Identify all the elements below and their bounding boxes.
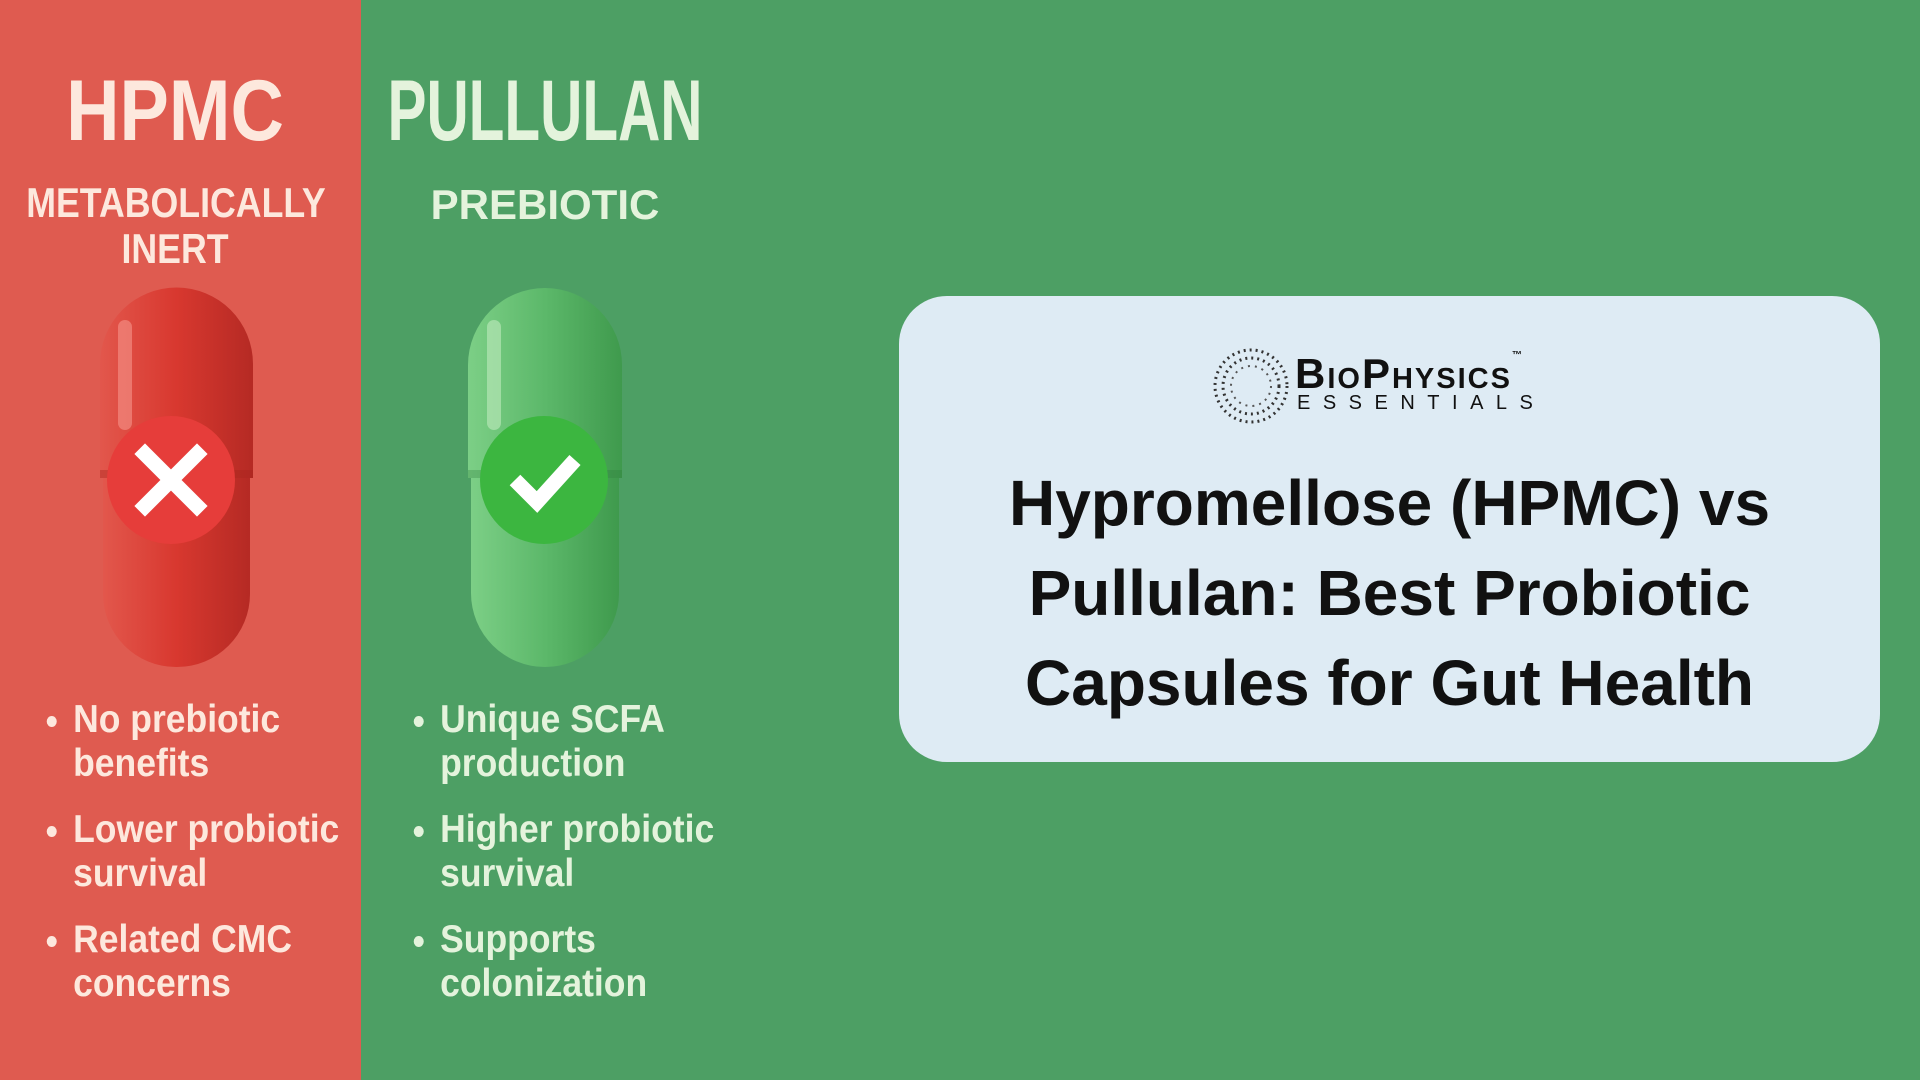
list: HPMC drawbacks: Related CMC: [73, 918, 292, 961]
title text: Hypromellose (HPMC) vs: [1009, 467, 1770, 539]
panel: HPMC: [0, 0, 361, 1080]
subheading: metabolically inert: INERT: [121, 225, 229, 272]
panel: Pullulan: [387, 63, 714, 1005]
heading: HPMC: HPMC: [66, 63, 284, 159]
list: Pullulan benefits: Supports: [440, 918, 596, 961]
title card: [899, 296, 1880, 762]
logo: BioPhysics Essentials: BioPhysics™: [1295, 350, 1524, 397]
subheading: metabolically inert: [26, 179, 326, 272]
list: Pullulan benefits: survival: [440, 852, 574, 895]
list: HPMC drawbacks: concerns: [73, 962, 231, 1005]
icon: green capsule with check: [468, 288, 622, 667]
list: HPMC drawbacks: benefits: [73, 742, 209, 785]
subheading: prebiotic: PREBIOTIC: [431, 181, 659, 228]
logo: BioPhysics Essentials: [1214, 348, 1545, 424]
list: HPMC drawbacks: [46, 698, 339, 1005]
list: Pullulan benefits: Unique SCFA: [440, 698, 665, 741]
list: HPMC drawbacks: No prebiotic: [73, 698, 280, 741]
list: Pullulan benefits: production: [440, 742, 625, 785]
subheading: metabolically inert: METABOLICALLY: [26, 179, 326, 226]
list: HPMC drawbacks: survival: [73, 852, 207, 895]
list: HPMC drawbacks: Lower probiotic: [73, 808, 339, 851]
title text: [1009, 467, 1770, 719]
list: Pullulan benefits: Higher probiotic: [440, 808, 714, 851]
icon: red capsule with X: [100, 288, 253, 667]
heading: PULLULAN: PULLULAN: [387, 63, 703, 159]
title text: Capsules for Gut Health: [1025, 647, 1754, 719]
list: Pullulan benefits: [414, 698, 714, 1005]
list: Pullulan benefits: colonization: [440, 962, 647, 1005]
logo: BioPhysics Essentials: ESSENTIALS: [1297, 392, 1545, 414]
title text: Pullulan: Best Probiotic: [1029, 557, 1750, 629]
